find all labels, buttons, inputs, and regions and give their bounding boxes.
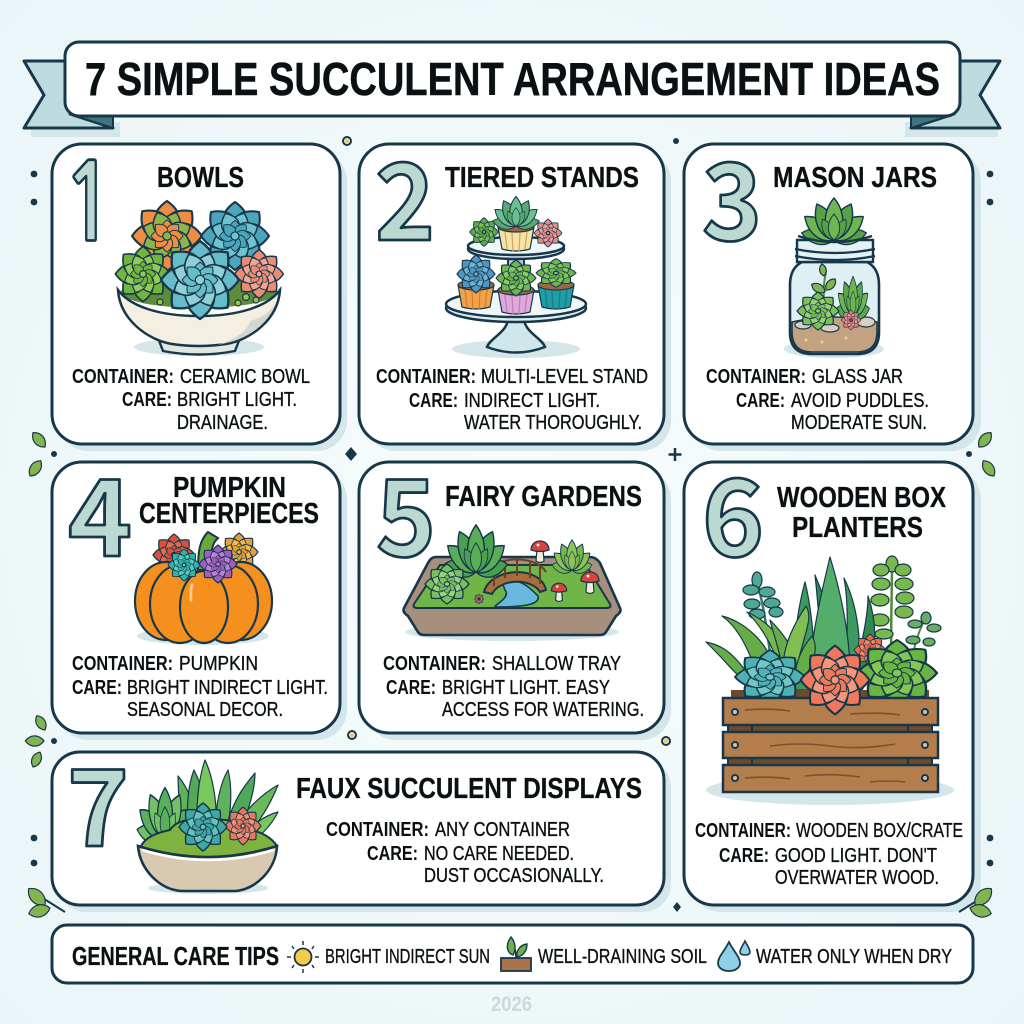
number 6: 6 [702,433,764,587]
care text 7 [326,819,604,887]
care text 5 [383,653,644,721]
illustration: fairy garden tray [404,525,620,641]
care text 4: BRIGHT INDIRECT LIGHT. [127,677,328,699]
care text 3: MODERATE SUN. [791,412,927,434]
care text 3: GLASS JAR [812,366,903,388]
care text 7: ANY CONTAINER [435,819,570,841]
care text 7: CONTAINER: [326,819,429,841]
care text 7: DUST OCCASIONALLY. [424,865,604,887]
care text 4: CARE: [72,677,122,699]
care text 3 [706,366,929,434]
footer box [52,925,973,983]
icon: sun [287,941,319,973]
number 7: 7 [67,723,129,877]
panel: wooden box planters [684,433,981,912]
card 6 [684,462,981,912]
care text 7: NO CARE NEEDED. [424,843,574,865]
care text 1: DRAINAGE. [177,412,268,434]
care text 7: CARE: [367,843,418,865]
care text 2: CONTAINER: [376,366,476,388]
illustration: faux succulent bowl [135,760,278,894]
title box [65,42,960,116]
panel: faux succulent displays [52,723,671,912]
illustration: succulent bowl [115,201,283,356]
care text 3: CARE: [736,390,785,412]
year: 2026 [491,993,532,1016]
care text 4: PUMPKIN [179,653,258,675]
care text 1: BRIGHT LIGHT. [177,389,297,411]
care text 1: CONTAINER: [72,366,174,388]
heading faux succulent displays: FAUX SUCCULENT DISPLAYS [296,773,642,805]
care text 6: CONTAINER: [695,820,791,842]
tip: water: WATER ONLY WHEN DRY [756,946,952,968]
care text 1: CARE: [122,389,172,411]
number 5: 5 [376,433,436,587]
tip: sun: BRIGHT INDIRECT SUN [325,946,490,968]
care text 6: WOODEN BOX/CRATE [796,820,963,842]
card 4 [52,462,347,740]
care text 6: GOOD LIGHT. DON'T [775,845,937,867]
care text 5: ACCESS FOR WATERING. [442,699,644,721]
number 1: 1 [62,151,116,256]
number 4: 4 [68,433,132,587]
care text 2: WATER THOROUGHLY. [464,412,642,434]
illustration: wooden crate with plants [706,556,954,805]
number 3: 3 [702,117,762,271]
care text 4 [72,653,328,721]
heading bowls: BOWLS [157,162,244,194]
panel: tiered stands [359,117,671,451]
card 1 [52,144,347,451]
care text 3: AVOID PUDDLES. [791,390,929,412]
card 3 [684,144,981,451]
heading pumpkin centerpieces [139,472,319,530]
panel: fairy gardens [359,433,671,740]
illustration: pumpkin [135,532,272,645]
card 2 [359,144,671,451]
care text 2: MULTI-LEVEL STAND [481,366,648,388]
care text 1: CERAMIC BOWL [180,366,310,388]
heading wooden box planters: WOODEN BOX [777,482,947,514]
care text 1 [72,366,310,434]
panel: bowls [52,144,347,451]
tip: soil: WELL-DRAINING SOIL [538,946,707,968]
ribbon left [24,61,120,137]
care text 3: CONTAINER: [706,366,806,388]
title banner [24,42,1000,137]
care text 2 [376,366,648,434]
illustration: tiered stand [446,196,586,358]
heading tiered stands: TIERED STANDS [445,162,639,194]
care text 5: SHALLOW TRAY [492,653,621,675]
care text 5: CONTAINER: [383,653,486,675]
care text 6: OVERWATER WOOD. [775,867,939,889]
decorations [24,137,998,919]
care text 4: SEASONAL DECOR. [127,699,283,721]
care text 5: CARE: [386,677,436,699]
footer heading: GENERAL CARE TIPS [72,941,279,971]
care text 6: CARE: [719,845,769,867]
heading wooden box planters: PLANTERS [792,512,923,544]
heading fairy gardens: FAIRY GARDENS [445,481,642,513]
care text 6 [695,820,963,889]
heading wooden box planters [777,482,947,544]
care text 2: INDIRECT LIGHT. [464,390,600,412]
illustration: mason jar [784,198,884,358]
panel: pumpkin centerpieces [52,433,347,740]
care text 5: BRIGHT LIGHT. EASY [442,677,610,699]
number 2: 2 [375,117,435,271]
panel: mason jars [684,117,981,451]
card 7 [52,752,671,912]
card 5 [359,462,671,740]
care text 4: CONTAINER: [72,653,173,675]
heading pumpkin centerpieces: CENTERPIECES [139,498,319,530]
panel: general care tips [52,925,973,983]
icon: water drops [718,941,750,971]
ribbon right [905,61,1000,137]
heading pumpkin centerpieces: PUMPKIN [173,472,286,504]
care text 2: CARE: [409,390,458,412]
icon: sprout in soil [501,937,531,971]
heading mason jars: MASON JARS [773,162,937,194]
